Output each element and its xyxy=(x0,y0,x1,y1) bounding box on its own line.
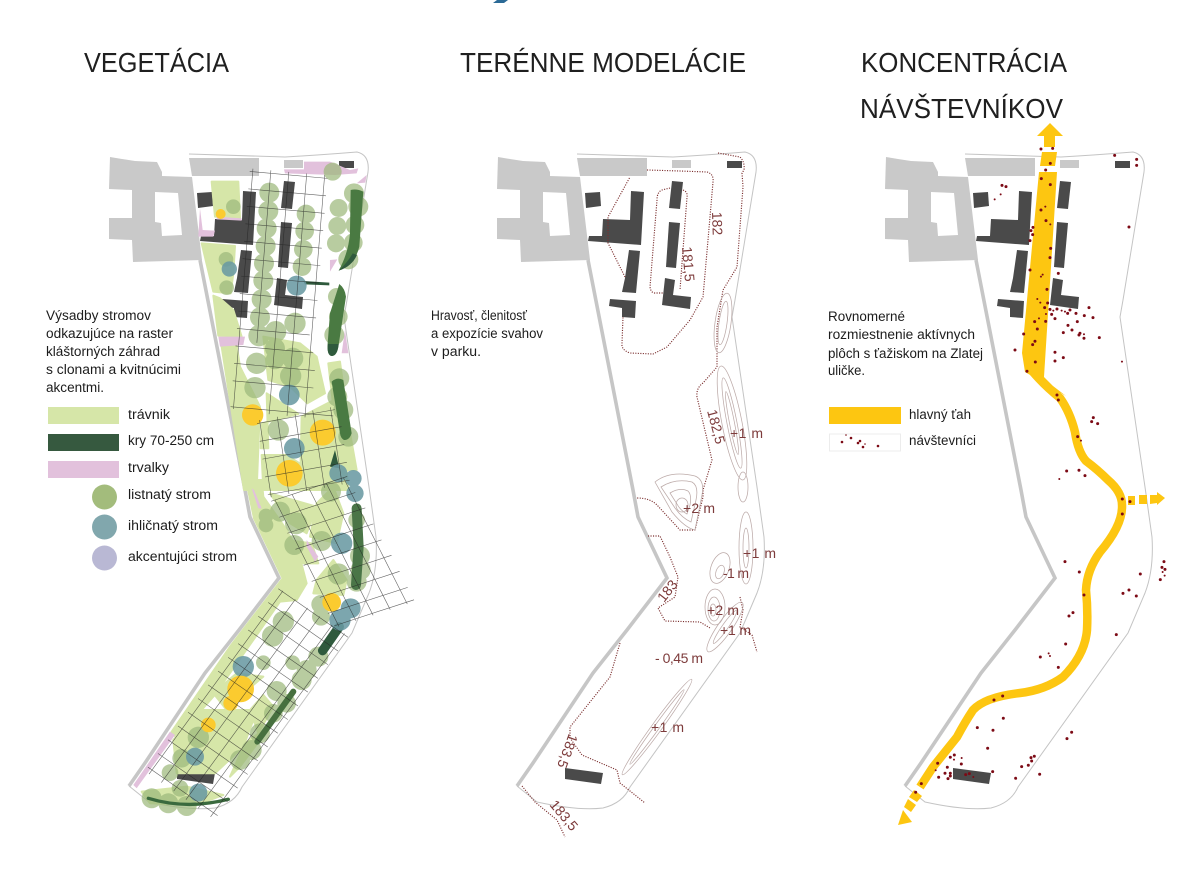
main route xyxy=(898,123,1165,825)
elevation labels: +2 m xyxy=(683,500,715,516)
elevation labels: 182 xyxy=(709,212,726,236)
text block: vegetation description: Výsadby stromov xyxy=(46,308,151,323)
text block: terrain description: a expozície svahov xyxy=(431,326,543,341)
elevation labels: -1 m xyxy=(723,565,749,581)
panel: terrain map xyxy=(497,152,776,837)
text block: visitors description: uličke. xyxy=(828,363,865,378)
legend item: perennials: trvalky xyxy=(128,460,169,475)
elevation labels: +2 m xyxy=(707,602,739,618)
title: Terénne modelácie: TERÉNNE MODELÁCIE xyxy=(460,47,746,78)
text block: vegetation description: akcentmi. xyxy=(46,380,104,395)
legend item: main route xyxy=(829,407,971,424)
title: Koncentrácia návštevníkov xyxy=(860,47,1067,124)
elevation labels xyxy=(547,212,776,834)
title: Vegetácia: VEGETÁCIA xyxy=(84,47,229,78)
legend item: visitors xyxy=(830,433,976,451)
panel: visitors map xyxy=(885,123,1166,825)
elevation labels: +1 m xyxy=(730,425,763,441)
panel: vegetation map xyxy=(109,152,415,820)
legend item: accent tree: akcentujúci strom xyxy=(128,549,237,564)
text block: terrain description xyxy=(431,308,543,359)
arrow: north exit xyxy=(1037,123,1063,147)
elevation labels: +1 m xyxy=(720,622,751,638)
text block: vegetation description: odkazujúce na raster xyxy=(46,326,174,341)
legend item: main route: hlavný ťah xyxy=(909,407,971,422)
elevation labels: 183,5 xyxy=(554,732,581,771)
logo fragment at top edge xyxy=(493,0,508,3)
text block: visitors description: Rovnomerné xyxy=(828,309,905,324)
elevation labels: - 0,45 m xyxy=(655,650,703,666)
text block: visitors description: plôch s ťažiskom na Zlatej xyxy=(828,346,983,361)
legend item: shrubs: kry 70-250 cm xyxy=(128,433,214,448)
text block: terrain description: Hravosť, členitosť xyxy=(431,308,528,323)
legend: visitors xyxy=(829,407,976,451)
legend item: visitors: návštevníci xyxy=(909,433,976,448)
base plan: buildings and park outline xyxy=(885,152,1152,809)
legend item: accent tree xyxy=(92,546,237,570)
text block: vegetation description: kláštorných záhrad xyxy=(46,344,160,359)
legend item: shrubs xyxy=(48,433,214,451)
elevation labels: 183 xyxy=(654,576,681,605)
conifer trees xyxy=(186,261,364,802)
terrain mounds xyxy=(618,292,753,778)
text block: vegetation description xyxy=(46,308,181,395)
elevation labels: 183,5 xyxy=(547,797,582,834)
legend item: lawn: trávnik xyxy=(128,407,170,422)
text block: vegetation description: s clonami a kvitnúcimi xyxy=(46,362,181,377)
title: Koncentrácia návštevníkov: NÁVŠTEVNÍKOV xyxy=(860,93,1063,124)
legend item: deciduous tree xyxy=(92,484,211,510)
monastery garden raster xyxy=(145,168,415,820)
legend: vegetation xyxy=(48,407,237,570)
legend item: lawn xyxy=(48,407,170,424)
arrow: south exit xyxy=(898,790,922,825)
legend item: conifer tree: ihličnatý strom xyxy=(128,518,218,533)
elevation labels: +1 m xyxy=(651,719,684,735)
elevation labels: 182,5 xyxy=(704,408,729,446)
elevation labels: 181,5 xyxy=(679,246,698,282)
accent trees xyxy=(201,209,341,732)
lawns xyxy=(142,182,357,805)
arrow: east exit xyxy=(1128,492,1165,505)
elevation labels: +1 m xyxy=(743,545,776,561)
shrubs xyxy=(148,189,363,804)
base plan: buildings and park outline xyxy=(497,152,764,809)
perennials xyxy=(133,162,367,788)
legend item: deciduous tree: listnatý strom xyxy=(128,487,211,502)
deciduous trees xyxy=(142,163,371,816)
base plan: buildings and park outline xyxy=(109,152,376,809)
visitor dots xyxy=(914,147,1166,794)
text block: terrain description: v parku. xyxy=(431,344,481,359)
legend item: conifer tree xyxy=(92,514,218,540)
legend item: perennials xyxy=(48,460,169,478)
title: Koncentrácia návštevníkov: KONCENTRÁCIA xyxy=(861,47,1067,78)
text block: visitors description: rozmiestnenie aktívnych xyxy=(828,327,975,342)
elevation contours xyxy=(522,153,757,837)
text block: visitors description xyxy=(828,309,983,378)
